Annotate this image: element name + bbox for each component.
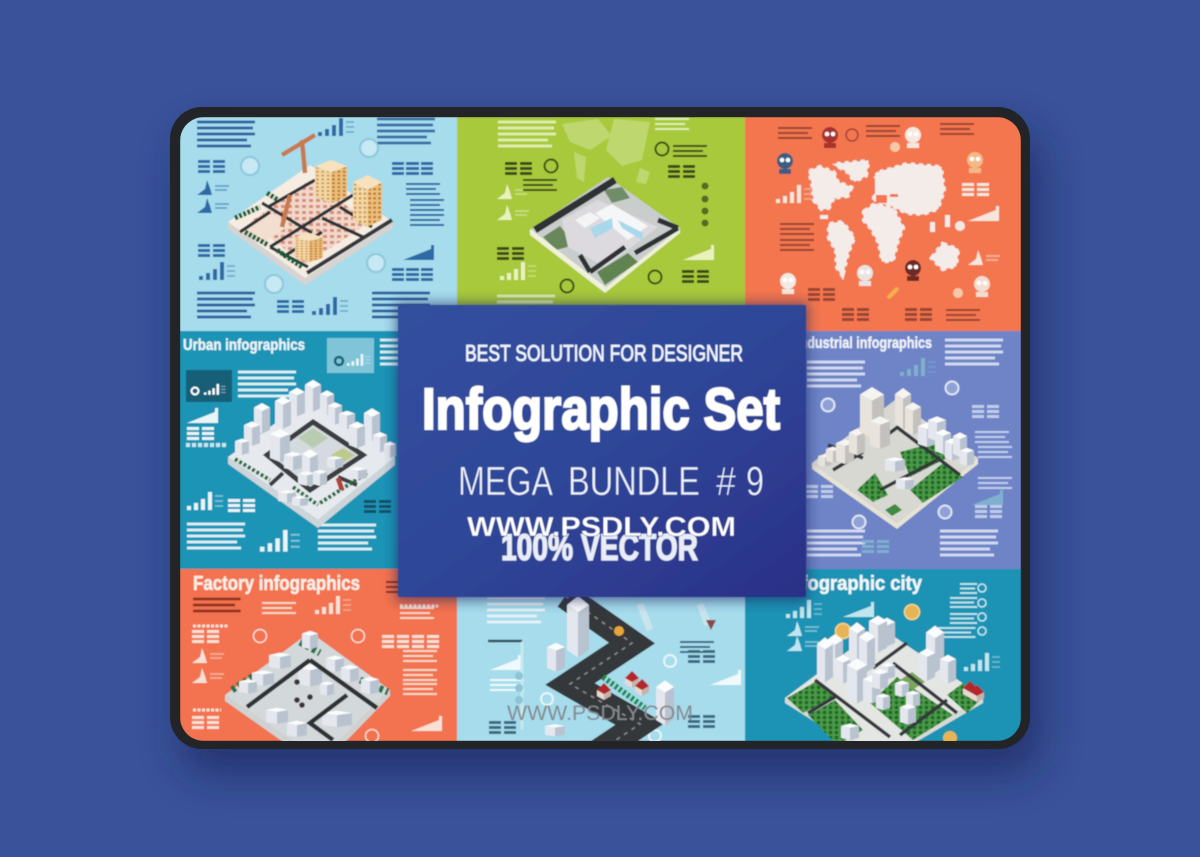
isometric green city — [785, 616, 984, 763]
frame drop shadow — [180, 130, 1042, 775]
vector label: 100% VECTOR — [501, 527, 698, 568]
subtitle: BEST SOLUTION FOR DESIGNER — [465, 340, 743, 366]
world map — [562, 119, 650, 184]
letter badges — [544, 142, 668, 292]
bundle label: # — [716, 458, 736, 504]
text blocks — [186, 338, 399, 552]
small charts — [806, 405, 1012, 518]
device frame — [170, 107, 1030, 749]
panel: road infographic — [456, 596, 746, 741]
letter badges — [836, 604, 920, 638]
small charts — [187, 408, 300, 552]
badges and labels — [778, 124, 980, 321]
isometric urban city — [228, 380, 396, 528]
isometric campus — [530, 177, 680, 293]
panel: urban infographics — [180, 330, 399, 570]
pixel world map — [810, 162, 957, 273]
bundle label — [458, 458, 764, 504]
bundle label: BUNDLE — [568, 458, 700, 504]
light dashboard tile — [327, 338, 374, 373]
center card shadow — [396, 303, 808, 601]
panel: industrial infographics — [805, 330, 1021, 570]
text blocks — [807, 340, 1003, 555]
city pieces along the road — [545, 596, 716, 736]
panel: factory infographics — [180, 568, 458, 741]
character heads — [777, 127, 990, 297]
panel: construction infographic — [180, 117, 457, 331]
main title: Infographic Set — [422, 377, 780, 442]
small charts — [786, 600, 1000, 671]
isometric industrial city — [812, 387, 978, 529]
text blocks — [938, 584, 977, 637]
panel: orange world map infographic — [745, 117, 1021, 331]
small charts — [192, 596, 442, 731]
bundle label: MEGA — [458, 458, 554, 504]
heading: factory infographics: Factory infographics — [193, 573, 360, 595]
letter badges — [254, 630, 378, 742]
collage of infographic panels — [180, 117, 1021, 768]
watermark lower: WWW.PSDLY.COM — [507, 702, 693, 725]
panel: infographic city — [745, 569, 1021, 763]
panel: green infographic — [456, 117, 746, 306]
text blocks — [497, 119, 689, 320]
small charts — [197, 118, 444, 315]
text blocks — [487, 598, 545, 622]
crane — [282, 135, 315, 227]
center card — [398, 305, 806, 597]
small charts — [490, 655, 741, 690]
small charts — [497, 184, 714, 280]
text blocks — [197, 119, 435, 317]
heading: urban infographics: Urban infographics — [183, 337, 305, 354]
letter badges — [822, 382, 958, 528]
isometric construction city — [228, 135, 393, 285]
letter badges — [515, 672, 523, 704]
heading: infographic city: Infographic city — [785, 573, 923, 595]
bundle label: 9 — [746, 458, 764, 504]
text blocks — [193, 582, 420, 611]
heading: industrial infographics: Industrial infographics — [796, 335, 932, 352]
letter badges — [241, 139, 385, 293]
winding road — [565, 596, 640, 752]
dark dashboard tile — [186, 370, 232, 402]
isometric factory block — [224, 630, 391, 741]
watermark on card: WWW.PSDLY.COM — [467, 511, 736, 542]
